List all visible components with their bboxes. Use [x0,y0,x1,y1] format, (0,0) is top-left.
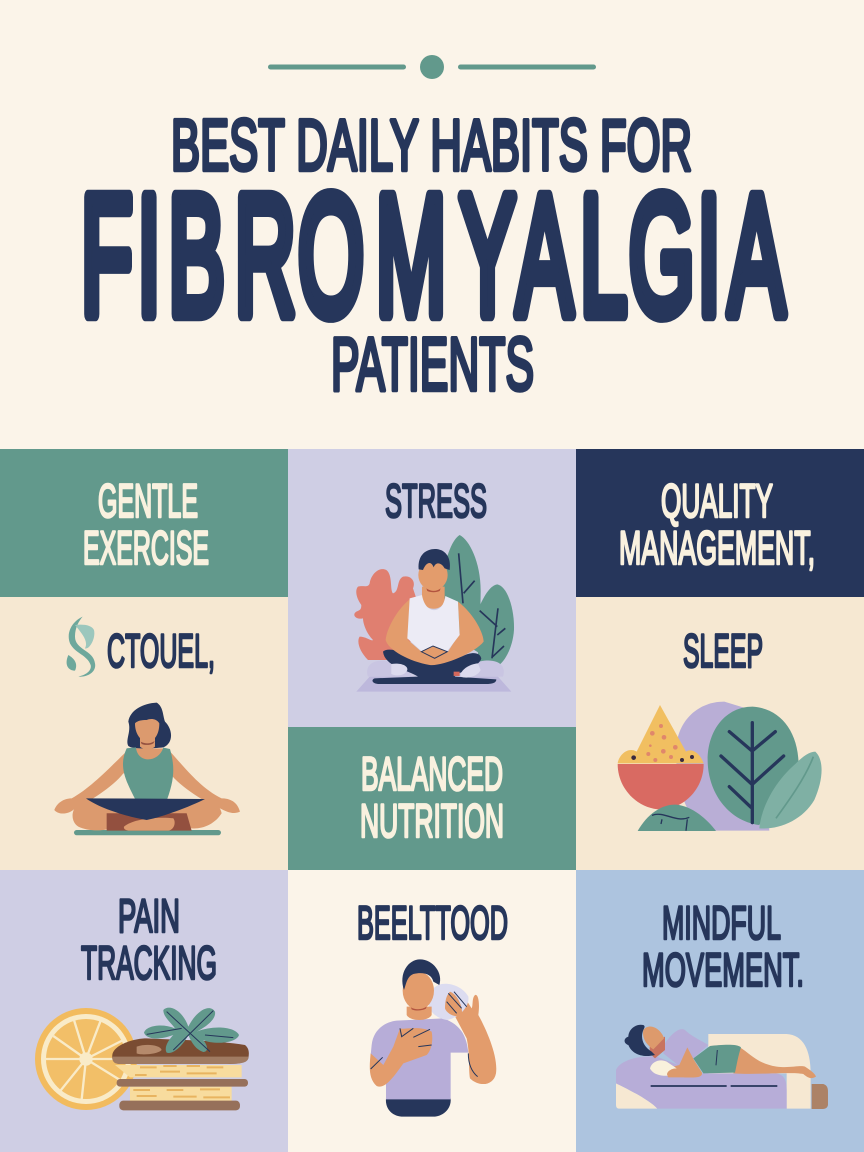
panel: quality management: QUALITY [661,474,773,527]
panel: sleep [576,597,864,870]
panel: gentle exercise: EXERCISE [83,521,209,574]
panel: ctouel with woman [0,597,288,870]
panel: balanced nutrition: NUTRITION [360,794,504,847]
panel: pain tracking: TRACKING [81,936,217,989]
panel: quality management [576,449,864,597]
icon: person holding glass [370,959,496,1117]
panel: pain tracking: PAIN [118,889,180,942]
panel: beelttood: BEELTTOOD [357,896,508,949]
panel: balanced nutrition: BALANCED [361,747,503,800]
panel: stress: STRESS [385,474,487,527]
icon: meditating man with plants [354,535,514,692]
icon: bowl and leaves [618,702,822,831]
icon: orange slice and sandwich [35,1008,249,1110]
top divider ornament [268,55,596,79]
panel: mindful movement [576,870,864,1152]
icon: person lying on a sofa [616,1025,828,1109]
icon: teal swirl [67,617,95,677]
panel: gentle exercise: GENTLE [98,474,198,527]
title [81,106,785,406]
panel: pain tracking [0,870,288,1152]
panel: stress [288,449,576,727]
panel: beelttood [288,870,576,1152]
icon: seated woman in lotus pose [54,703,240,835]
title line 2: FIBROMYALGIA [81,161,785,351]
title line 3: PATIENTS [331,322,534,406]
panel: sleep: SLEEP [683,624,763,677]
panel: ctouel with woman: CTOUEL, [107,624,215,677]
panel: gentle exercise [0,449,289,597]
panel: balanced nutrition [288,727,576,870]
